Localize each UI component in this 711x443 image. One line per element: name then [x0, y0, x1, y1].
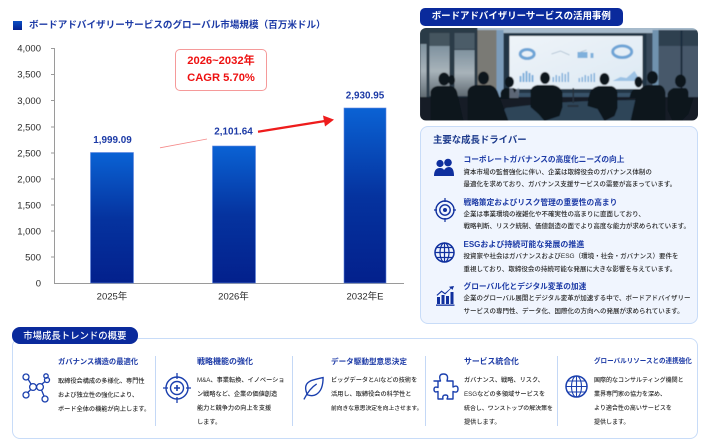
trend: data driven decisions: ビッグデータとAIなどの技術を: [331, 377, 417, 384]
driver: strategy and risk: 企業は事業環境の複雑化や不確実性の高まりに直面しており、: [464, 211, 645, 218]
trend: data driven decisions: [303, 357, 422, 412]
driver: globalization and digital: 企業のグローバル展開とデジタル変革が加速する中で、ボードアドバイザリー: [464, 295, 691, 302]
icon: puzzle: [433, 373, 459, 400]
icon: globe: [434, 242, 455, 263]
driver: globalization and digital: サービスの専門性、データ化、国際化の方向への発展が求められています。: [464, 308, 684, 315]
trend: service integration: 提供します。: [464, 419, 501, 426]
driver: ESG: 重視しており、取締役会の持続可能な発展に大きな影響を与えています。: [464, 266, 676, 273]
bar chart: 2,000: [17, 174, 41, 186]
driver: ESG: 投資家や社会はガバナンスおよびESG（環境・社会・ガバナンス）要件を: [464, 253, 678, 260]
heading: use cases: ボードアドバイザリーサービスの活用事例: [432, 11, 611, 22]
driver: ESG: [434, 240, 678, 273]
icon: people: [434, 158, 454, 176]
divider: [425, 356, 426, 426]
CAGR callout: CAGR 5.70%: [187, 72, 255, 84]
driver: strategy and risk: 戦略策定およびリスク管理の重要性の高まり: [464, 198, 617, 207]
trend: global resources: より適合性の高いサービスを: [594, 406, 672, 412]
icon: rising chart: [436, 286, 454, 306]
icon: network: [22, 373, 50, 403]
panel: growth drivers: [420, 126, 698, 324]
heading: growth drivers: 主要な成長ドライバー: [433, 134, 527, 145]
heading: market growth trends: [12, 327, 138, 344]
driver: corporate governance: 最適化を求めており、ガバナンス支援サービスの需要が高まっています。: [464, 181, 676, 188]
divider: [292, 356, 293, 426]
bar chart: 2026年: [218, 290, 249, 302]
bar chart: 3,000: [17, 96, 41, 107]
bar chart: 2,500: [17, 122, 41, 134]
bar chart: 1,000: [17, 226, 41, 238]
trend: service integration: ESGなどの多領域サービスを: [464, 391, 545, 398]
trend: governance structure: ガバナンス構造の最適化: [58, 357, 138, 366]
trend: data driven decisions: データ駆動型意思決定: [331, 357, 407, 366]
driver: corporate governance: 資本市場の監督強化に伴い、企業は取締役会のガバナンス体制の: [464, 169, 652, 176]
trend: service integration: ガバナンス、戦略、リスク、: [464, 377, 544, 384]
driver: globalization and digital: グローバル化とデジタル変革の加速: [464, 282, 586, 291]
bar chart: 1,999.09: [93, 135, 132, 146]
heading: market growth trends: 市場成長トレンドの概要: [23, 330, 126, 341]
bar chart: 2,500: [17, 148, 41, 160]
trend: governance structure: [22, 357, 150, 413]
bar chart: 2,930.95: [346, 90, 385, 102]
trend: data driven decisions: 前向きな意思決定を向上させます。: [331, 406, 422, 412]
CAGR callout: [175, 49, 267, 90]
trend: global resources: グローバルリソースとの連携強化: [594, 358, 692, 365]
icon: leaf: [303, 376, 324, 400]
driver: globalization and digital: [436, 282, 691, 315]
bar chart: 4,000: [17, 44, 41, 54]
trend: strategic function: します。: [197, 419, 221, 426]
divider: [154, 356, 156, 426]
growth arrow: [160, 116, 334, 148]
driver: strategy and risk: [434, 198, 690, 230]
bar chart: 3,500: [17, 70, 41, 80]
bar chart: 2032年E: [347, 290, 383, 302]
bar chart: 2025年: [97, 290, 128, 302]
chart title: ボードアドバイザリーサービスのグローバル市場規模（百万米ドル）: [29, 20, 326, 31]
bar chart: 500: [25, 252, 41, 264]
bar chart: 1,500: [17, 200, 41, 212]
trend: governance structure: ボード全体の機能が向上します。: [58, 406, 150, 413]
icon: target: [434, 198, 456, 222]
trend: global resources: 国際的なコンサルティング機関と: [594, 378, 684, 384]
heading: use cases: [420, 8, 622, 26]
driver: strategy and risk: 戦略判断、リスク統制、価値創造の面でより高度な能力が求められています。: [464, 223, 690, 230]
icon: target: [163, 373, 191, 403]
divider: [557, 356, 558, 426]
driver: corporate governance: コーポレートガバナンスの高度化ニーズの向上: [464, 155, 624, 164]
trend: global resources: 提供します。: [594, 420, 629, 426]
trend: service integration: 統合し、ワンストップの解決策を: [464, 406, 553, 412]
trend: global resources: [565, 356, 692, 426]
trend: data driven decisions: 活用し、取締役会の科学性と: [331, 391, 411, 398]
trend: strategic function: 戦略機能の強化: [197, 357, 253, 366]
trend: governance structure: および独立性の強化により、: [58, 392, 138, 399]
trend: strategic function: M&A、事業転換、イノベーショ: [197, 377, 285, 384]
panel: market growth trends: [12, 338, 698, 438]
trend: governance structure: 取締役会構成の多様化、専門性: [58, 378, 145, 385]
trend: strategic function: 能力と競争力の向上を支援: [197, 405, 271, 412]
trend: global resources: 業界専門家の協力を深め、: [594, 392, 666, 398]
icon: globe: [565, 375, 588, 398]
trend: strategic function: ン戦略など、企業の価値創造: [197, 391, 277, 398]
bar chart: [17, 44, 404, 302]
bar chart: 2,101.64: [214, 126, 253, 138]
driver: corporate governance: [434, 154, 676, 188]
trend: strategic function: [163, 357, 285, 426]
trend: service integration: サービス統合化: [464, 357, 519, 366]
CAGR callout: 2026~2032年: [187, 55, 255, 67]
driver: ESG: ESGおよび持続可能な発展の推進: [464, 240, 584, 249]
bar chart: 0: [36, 278, 41, 290]
photo: boardroom meeting: [420, 28, 698, 120]
trend: service integration: [433, 357, 553, 426]
